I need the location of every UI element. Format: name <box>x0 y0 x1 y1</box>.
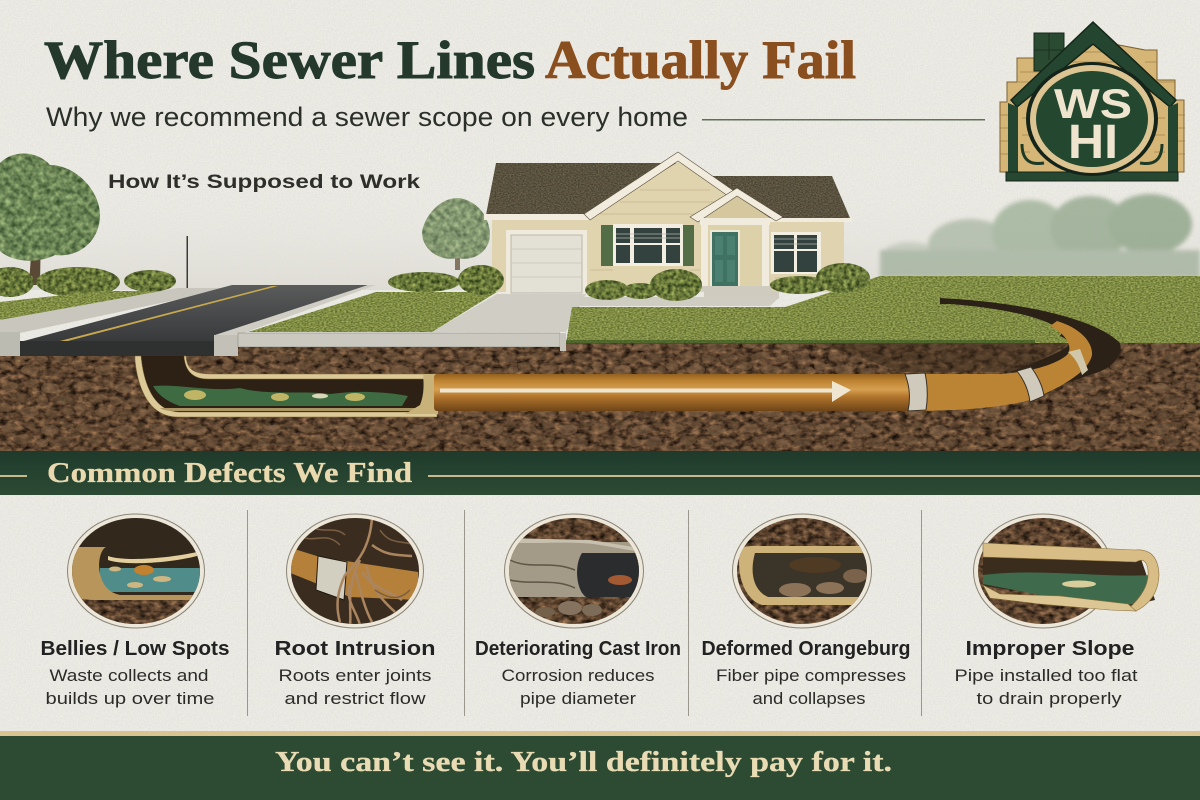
icon: collapsed fiber pipe <box>732 514 872 630</box>
icon: roots on pipe <box>285 510 425 635</box>
description: orangeburg: Fiber pipe compresses <box>716 666 906 685</box>
logo base <box>1006 172 1178 181</box>
front door <box>710 230 740 287</box>
description: bellies: Waste collects and <box>50 666 208 685</box>
long curb <box>238 333 560 347</box>
icon: flat pipe <box>974 514 1159 630</box>
description: improper slope: to drain properly <box>976 689 1122 708</box>
flow arrow <box>440 381 851 402</box>
cutaway pipe section <box>135 356 438 417</box>
defect: root intrusion <box>274 510 436 708</box>
description: cast iron: Corrosion reduces <box>502 666 654 685</box>
logo letters: WS <box>1054 80 1132 127</box>
description: cast iron: pipe diameter <box>520 689 636 708</box>
label: bellies: Bellies / Low Spots <box>40 638 229 660</box>
footer banner <box>0 731 1200 800</box>
house eaves <box>484 214 852 222</box>
pipe clamp one <box>905 373 927 411</box>
main gable trim <box>584 152 734 220</box>
road and curbs <box>0 285 560 357</box>
defect: bellies / low spots <box>40 510 229 708</box>
tree trunk <box>29 225 41 285</box>
pipe trench <box>940 298 1121 392</box>
porch steps <box>702 286 779 297</box>
walkway <box>575 297 780 306</box>
porch gable <box>704 196 770 218</box>
description: bellies: builds up over time <box>46 689 214 708</box>
road front face <box>20 341 216 356</box>
road surface <box>20 285 368 342</box>
house left roof <box>486 163 680 215</box>
subtitle: Why we recommend a sewer scope on every home <box>46 102 688 132</box>
logo letters: HI <box>1068 116 1118 169</box>
shrubs <box>388 263 870 301</box>
distant lawn <box>770 276 1200 346</box>
title <box>44 30 856 90</box>
cutaway interior <box>138 356 425 413</box>
label: improper slope: Improper Slope <box>966 638 1134 660</box>
flat pipe water <box>983 572 1155 605</box>
description: improper slope: Pipe installed too flat <box>954 666 1138 685</box>
logo chimney <box>1034 33 1064 71</box>
house <box>484 152 852 297</box>
right shutter <box>683 225 694 266</box>
section label: How It’s Supposed to Work <box>108 172 421 193</box>
label: cast iron: Deteriorating Cast Iron <box>475 638 681 660</box>
garage door <box>506 230 587 293</box>
flat pipe interior <box>983 556 1155 606</box>
siding lines <box>590 190 820 278</box>
road yellow line <box>56 286 278 342</box>
description: orangeburg: and collapses <box>752 689 866 708</box>
defect: deformed orangeburg <box>702 514 910 708</box>
cutaway water <box>153 386 408 406</box>
pipe straight <box>434 374 914 411</box>
tree left <box>0 154 100 285</box>
icon: corroded cast iron pipe <box>504 514 645 630</box>
right curb edge <box>215 285 376 335</box>
porch columns <box>701 222 769 286</box>
tree line right <box>880 194 1200 278</box>
title: Where Sewer Lines <box>44 30 535 90</box>
flat pipe top wall <box>983 543 1159 611</box>
logo letters <box>1054 80 1132 169</box>
sewer pipe <box>434 321 1092 411</box>
debris in water <box>184 390 365 401</box>
description: root intrusion: Roots enter joints <box>278 666 432 685</box>
logo walls <box>1008 103 1178 172</box>
pipe clamp three <box>1068 349 1088 375</box>
porch beam <box>700 218 770 225</box>
description: cast iron <box>502 666 654 708</box>
inner soil shadow <box>820 343 1070 372</box>
description: improper slope <box>954 666 1138 708</box>
house right roof <box>700 176 850 218</box>
banner heading: Common Defects We Find <box>47 458 412 489</box>
logo bricks <box>1000 40 1184 172</box>
cutaway top wall <box>184 356 425 379</box>
pipe bend <box>905 321 1092 411</box>
left grass strip <box>0 291 178 320</box>
defect: improper slope <box>954 514 1159 708</box>
right curb block <box>214 335 238 357</box>
left shutter <box>601 225 613 266</box>
main window <box>613 224 683 266</box>
pipe clamp two <box>1017 367 1044 402</box>
cutaway coupler <box>405 374 438 414</box>
logo roof <box>1011 22 1176 107</box>
defects banner <box>0 451 1200 495</box>
misty horizon <box>0 190 1200 290</box>
tree canopy <box>0 154 100 261</box>
flat pipe bottom wall <box>983 585 1136 611</box>
right lawn <box>566 304 1061 343</box>
soil cross-section <box>0 343 1200 451</box>
porch gable trim <box>690 188 783 222</box>
footer slogan: You can’t see it. You’ll definitely pay for it. <box>275 747 892 778</box>
house walls <box>492 218 844 292</box>
left sidewalk <box>0 288 232 340</box>
left curb <box>0 332 20 356</box>
driveway <box>432 294 586 332</box>
main gable wall <box>590 162 728 290</box>
defect: deteriorating cast iron <box>475 514 681 708</box>
description: bellies <box>46 666 214 708</box>
dividers <box>247 510 922 716</box>
tree behind house <box>422 198 490 270</box>
label: root intrusion: Root Intrusion <box>274 638 436 660</box>
porch wall <box>700 224 770 288</box>
description: root intrusion: and restrict flow <box>284 689 426 708</box>
logo: WSHI house badge <box>1000 22 1185 181</box>
lamp post <box>184 236 190 293</box>
label: orangeburg: Deformed Orangeburg <box>702 638 910 660</box>
right window <box>771 232 821 274</box>
icon: belly pipe <box>67 514 205 628</box>
far left hedges <box>0 267 176 297</box>
cutaway outer wall <box>135 356 437 417</box>
logo oval <box>1026 62 1158 176</box>
logo corner scrolls <box>1022 144 1162 164</box>
description: orangeburg <box>716 666 906 708</box>
description: root intrusion <box>278 666 432 708</box>
middle lawn <box>248 292 497 332</box>
title: Actually Fail <box>545 30 856 90</box>
